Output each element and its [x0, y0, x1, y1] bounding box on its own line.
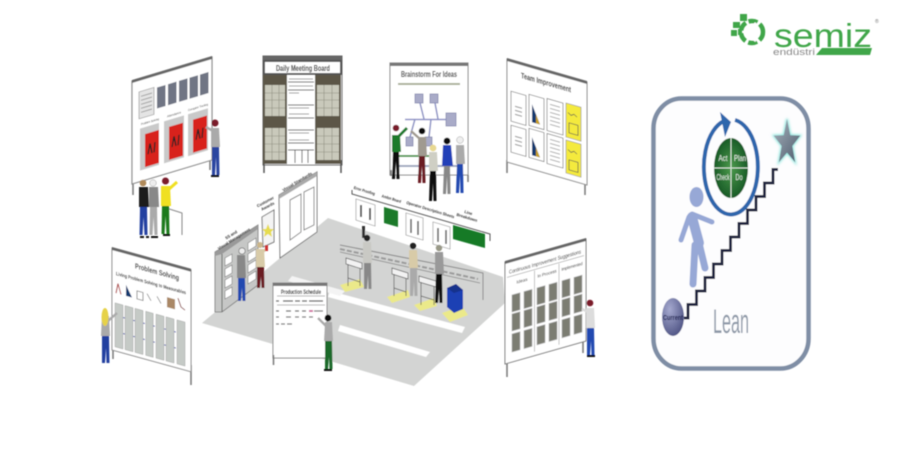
label: operator description sheets: Operator Description Sheets	[406, 200, 456, 219]
label: line breakdown: Line	[464, 209, 473, 216]
panel: lean	[654, 98, 808, 368]
label: 5S: Visual Management	[217, 227, 252, 251]
icon: climbing figure	[681, 187, 712, 284]
board: daily meeting	[263, 56, 342, 173]
group of three people with table	[139, 178, 182, 238]
column headings: Implemented	[562, 261, 583, 272]
column headings: In Process	[537, 268, 557, 279]
label: error proofing: Error Proofing	[353, 185, 376, 196]
person at continuous improvement board	[582, 300, 595, 357]
icon: star	[774, 119, 800, 162]
person at production board	[318, 315, 333, 371]
production title: Production Schedule	[281, 290, 321, 296]
team improvement title: Team Improvement	[521, 71, 571, 94]
board: brainstorm	[390, 63, 468, 182]
PDCA labels	[716, 154, 746, 182]
label: 5S: 5S and	[224, 229, 238, 240]
blue bin	[447, 284, 463, 313]
board: production schedule	[273, 283, 327, 365]
PDCA labels: Do	[736, 173, 743, 182]
person at metrics board	[206, 120, 220, 177]
person at problem solving board	[101, 308, 117, 363]
logo subtitle: endüstri	[773, 47, 815, 57]
continuous improvement title: Continuous Improvement Suggestions	[509, 249, 581, 276]
column headings	[517, 261, 583, 285]
PDCA circle	[714, 138, 748, 198]
assembly line conveyor and stations	[340, 245, 483, 322]
logo: semiz	[731, 14, 879, 57]
current ball	[662, 298, 684, 336]
two people at wall	[237, 242, 268, 301]
board: metrics: Corrugator Tracking	[188, 102, 208, 112]
PDCA ring	[704, 112, 758, 214]
suggestion cards	[512, 275, 582, 352]
problem solving title: Problem Solving	[135, 261, 179, 282]
factory floor	[202, 218, 505, 386]
board: metrics	[132, 56, 212, 195]
board: problem solving	[112, 247, 191, 385]
fishbone diagram	[405, 94, 456, 146]
lean label: Lean	[713, 302, 749, 341]
label: line breakdown: Breakdown	[456, 212, 479, 223]
assembly line signage	[352, 185, 490, 249]
PDCA labels: Plan	[734, 154, 746, 163]
board: metrics: Problem Solving	[141, 117, 159, 126]
label: customer awards: Awards	[260, 200, 276, 212]
people at brainstorm board	[392, 125, 465, 201]
stairs	[684, 170, 778, 318]
line workers	[362, 226, 444, 303]
wall: visual standards	[279, 170, 317, 258]
registered mark: ®	[875, 18, 879, 25]
wall: 5S and visual management	[214, 222, 258, 312]
label: andon board: Andon Board	[381, 193, 402, 204]
board: continuous improvement	[505, 238, 586, 377]
board: metrics: Attendance	[167, 110, 181, 118]
board: team improvement	[507, 58, 587, 195]
PDCA labels: Act	[718, 154, 728, 163]
brainstorm title: Brainstorm For Ideas	[401, 70, 457, 79]
PDCA labels: Check	[716, 173, 730, 182]
wall: customer awards	[256, 195, 277, 247]
current ball: Current	[663, 313, 683, 322]
logo mark	[731, 14, 763, 43]
logo wordmark: semiz	[774, 17, 872, 54]
board title: Daily Meeting Board	[276, 63, 330, 73]
label: customer awards: Customer	[256, 195, 275, 208]
column headings: Ideas	[517, 276, 528, 285]
problem solving subtitle: Living Problem Solving to Measurables	[116, 271, 186, 296]
label: visual standards: Visual Standards	[281, 170, 314, 193]
